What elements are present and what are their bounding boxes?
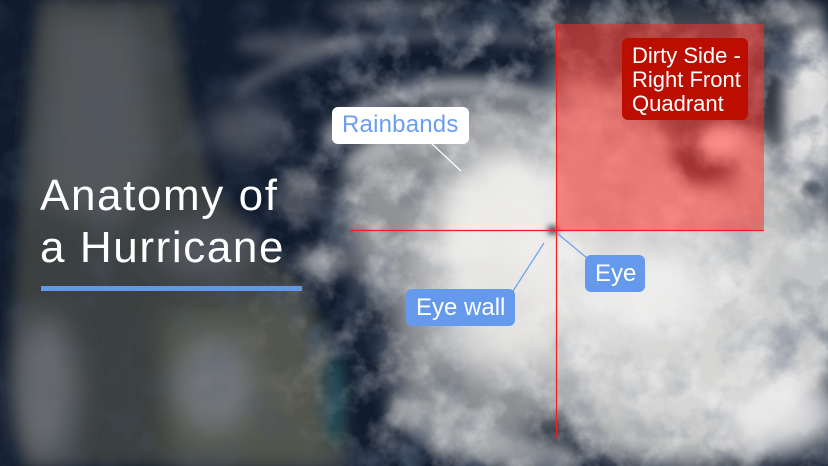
label: eye: Eye xyxy=(595,260,636,287)
label: eye wall: Eye wall xyxy=(416,294,505,321)
label: rainbands: Rainbands xyxy=(342,111,459,138)
dark eye xyxy=(547,225,559,235)
label: eye wall xyxy=(406,289,515,326)
cloud texture xyxy=(240,0,828,466)
land mass xyxy=(12,0,345,466)
rainbands leader xyxy=(431,143,461,171)
title: Anatomy of xyxy=(40,171,279,220)
hurricane core xyxy=(390,110,670,410)
quadrant base clouds xyxy=(556,60,686,235)
horizontal axis xyxy=(349,230,764,232)
title underline xyxy=(41,286,302,291)
swirling cloud bands xyxy=(240,34,560,460)
label: dirty side: Quadrant xyxy=(632,91,724,116)
right edge and upper right clouds xyxy=(780,20,828,200)
vertical axis xyxy=(556,24,558,438)
upper left cloud streaks xyxy=(203,0,465,276)
label: dirty side: Dirty Side - xyxy=(632,43,741,68)
title xyxy=(40,171,285,272)
label: rainbands xyxy=(332,107,469,144)
eye wall leader xyxy=(513,243,544,291)
label: dirty side: Right Front xyxy=(632,67,741,92)
bright eastern clouds xyxy=(570,250,710,330)
bright inner core xyxy=(443,157,567,293)
broad storm shield xyxy=(340,95,620,335)
label: eye xyxy=(585,255,645,292)
title: a Hurricane xyxy=(40,223,285,272)
eye leader xyxy=(558,234,587,258)
label: dirty side xyxy=(622,38,748,120)
dirty side quadrant overlay xyxy=(556,24,764,231)
